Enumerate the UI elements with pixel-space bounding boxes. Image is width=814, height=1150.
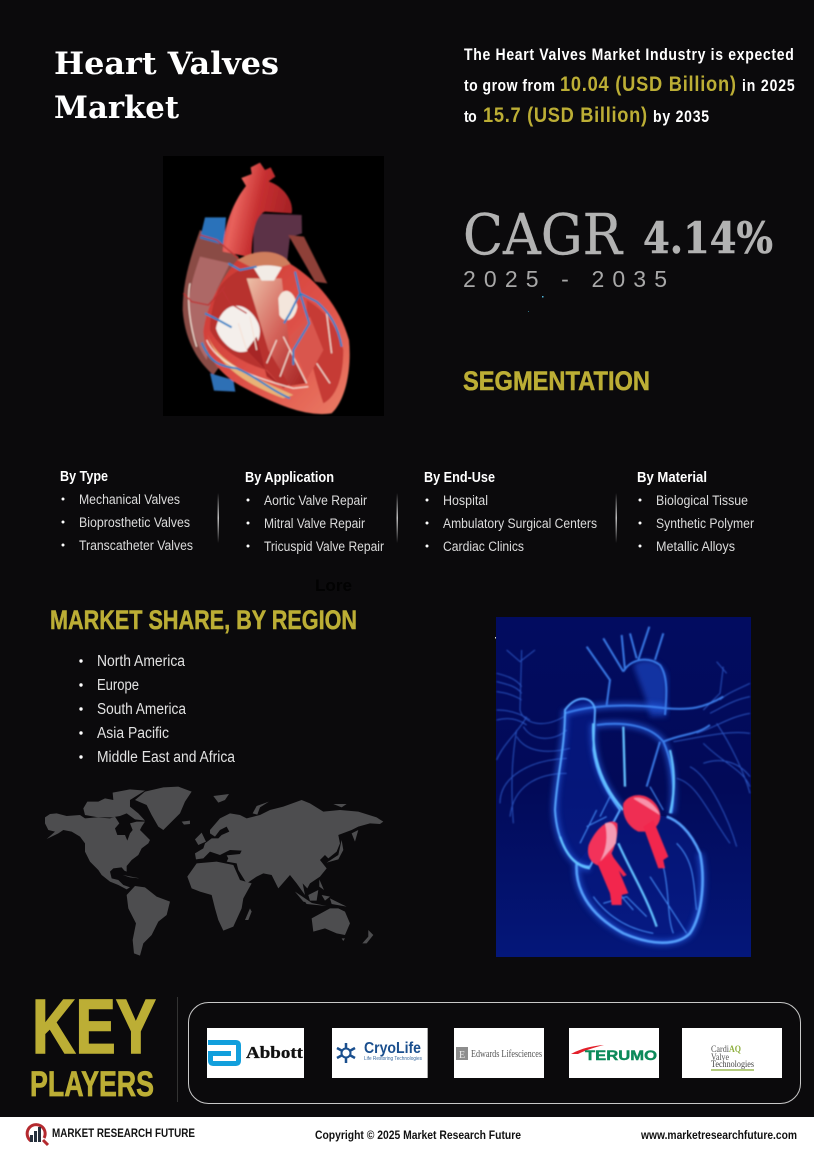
logo: Abbott	[207, 1028, 304, 1078]
logo: CardiAQ Valve Technologies: Valve	[711, 1053, 729, 1063]
footer bar: Copyright © 2025 Market Research Future	[315, 1128, 521, 1142]
segmentation: by end-use: Ambulatory Surgical Centers	[443, 516, 597, 531]
logo: CardiAQ Valve Technologies: Cardi	[711, 1045, 729, 1055]
segmentation: by type: By Type	[60, 468, 108, 485]
market forecast text: to	[464, 108, 477, 126]
segmentation: by type	[60, 468, 193, 553]
market forecast text: 15.7 (USD Billion)	[483, 104, 647, 127]
logo: Terumo	[569, 1028, 659, 1078]
heading: key players: KEY	[32, 984, 156, 1070]
region list	[79, 653, 235, 766]
segmentation: by end-use: Hospital	[443, 493, 488, 508]
region list: Middle East and Africa	[97, 749, 235, 766]
key players container	[188, 1002, 800, 1104]
heading: key players: PLAYERS	[30, 1065, 154, 1104]
logo: Edwards Lifesciences: Edwards Lifesciences	[471, 1048, 542, 1060]
region list: South America	[97, 701, 186, 718]
world map	[45, 787, 383, 956]
segmentation: by type: Transcatheter Valves	[79, 538, 193, 553]
segmentation: by material	[637, 469, 754, 554]
logo: Edwards Lifesciences	[454, 1028, 544, 1078]
logo: CardiAQ Valve Technologies: Technologies	[711, 1060, 754, 1070]
icon: market research future magnifier	[27, 1125, 48, 1145]
logo: CryoLife: CryoLife	[364, 1040, 421, 1057]
logo: CardiAQ Valve Technologies	[682, 1028, 782, 1078]
logo: Abbott: Abbott	[246, 1043, 303, 1062]
CAGR figure: CAGR	[463, 203, 624, 268]
footer bar: MARKET RESEARCH FUTURE	[52, 1126, 195, 1140]
segmentation: by end-use: Cardiac Clinics	[443, 539, 524, 554]
region list: North America	[97, 653, 185, 670]
title: Market	[54, 90, 180, 126]
segmentation: by application: Mitral Valve Repair	[264, 516, 365, 531]
footer bar	[0, 1117, 814, 1150]
CAGR figure	[463, 203, 773, 292]
illustration: blue x-ray heart with red valves	[496, 617, 751, 957]
logo: CryoLife	[332, 1028, 428, 1078]
market forecast text: by 2035	[653, 108, 710, 126]
region list: Asia Pacific	[97, 725, 169, 742]
market forecast text: 10.04 (USD Billion)	[560, 73, 736, 96]
segmentation: by end-use	[424, 469, 597, 554]
segmentation: by application: By Application	[245, 469, 334, 486]
heading: market share by region: MARKET SHARE, BY REGION	[50, 605, 357, 635]
logo: CardiAQ Valve Technologies: AQ	[729, 1045, 741, 1055]
segmentation: by application: Aortic Valve Repair	[264, 493, 367, 508]
logo: CryoLife: Life Restoring Technologies	[364, 1056, 422, 1062]
CAGR figure: 2025 - 2035	[463, 266, 667, 292]
market forecast text: The Heart Valves Market Industry is expected	[464, 46, 794, 64]
specks	[495, 296, 544, 638]
title	[54, 46, 279, 126]
segmentation: by end-use: By End-Use	[424, 469, 495, 486]
segmentation: by type: Mechanical Valves	[79, 492, 180, 507]
title: Heart Valves	[54, 46, 279, 82]
logo: Terumo: TERUMO	[585, 1048, 657, 1063]
faint stray text: Lore	[315, 576, 352, 595]
segmentation: by application	[245, 469, 384, 554]
logo: Edwards Lifesciences: E	[459, 1050, 465, 1061]
heading: segmentation: SEGMENTATION	[463, 366, 650, 396]
market forecast text	[464, 46, 795, 127]
CAGR figure: 4.14%	[643, 214, 773, 264]
segmentation: by material: By Material	[637, 469, 707, 486]
illustration: anatomical heart	[163, 156, 384, 416]
segmentation: by application: Tricuspid Valve Repair	[264, 539, 384, 554]
segmentation: by material: Biological Tissue	[656, 493, 748, 508]
segmentation: by material: Synthetic Polymer	[656, 516, 754, 531]
region list: Europe	[97, 677, 139, 694]
heading: key players	[30, 984, 156, 1104]
market forecast text: to grow from	[464, 77, 555, 95]
segmentation: by type: Bioprosthetic Valves	[79, 515, 190, 530]
market forecast text: in 2025	[742, 77, 795, 95]
segmentation: by material: Metallic Alloys	[656, 539, 735, 554]
